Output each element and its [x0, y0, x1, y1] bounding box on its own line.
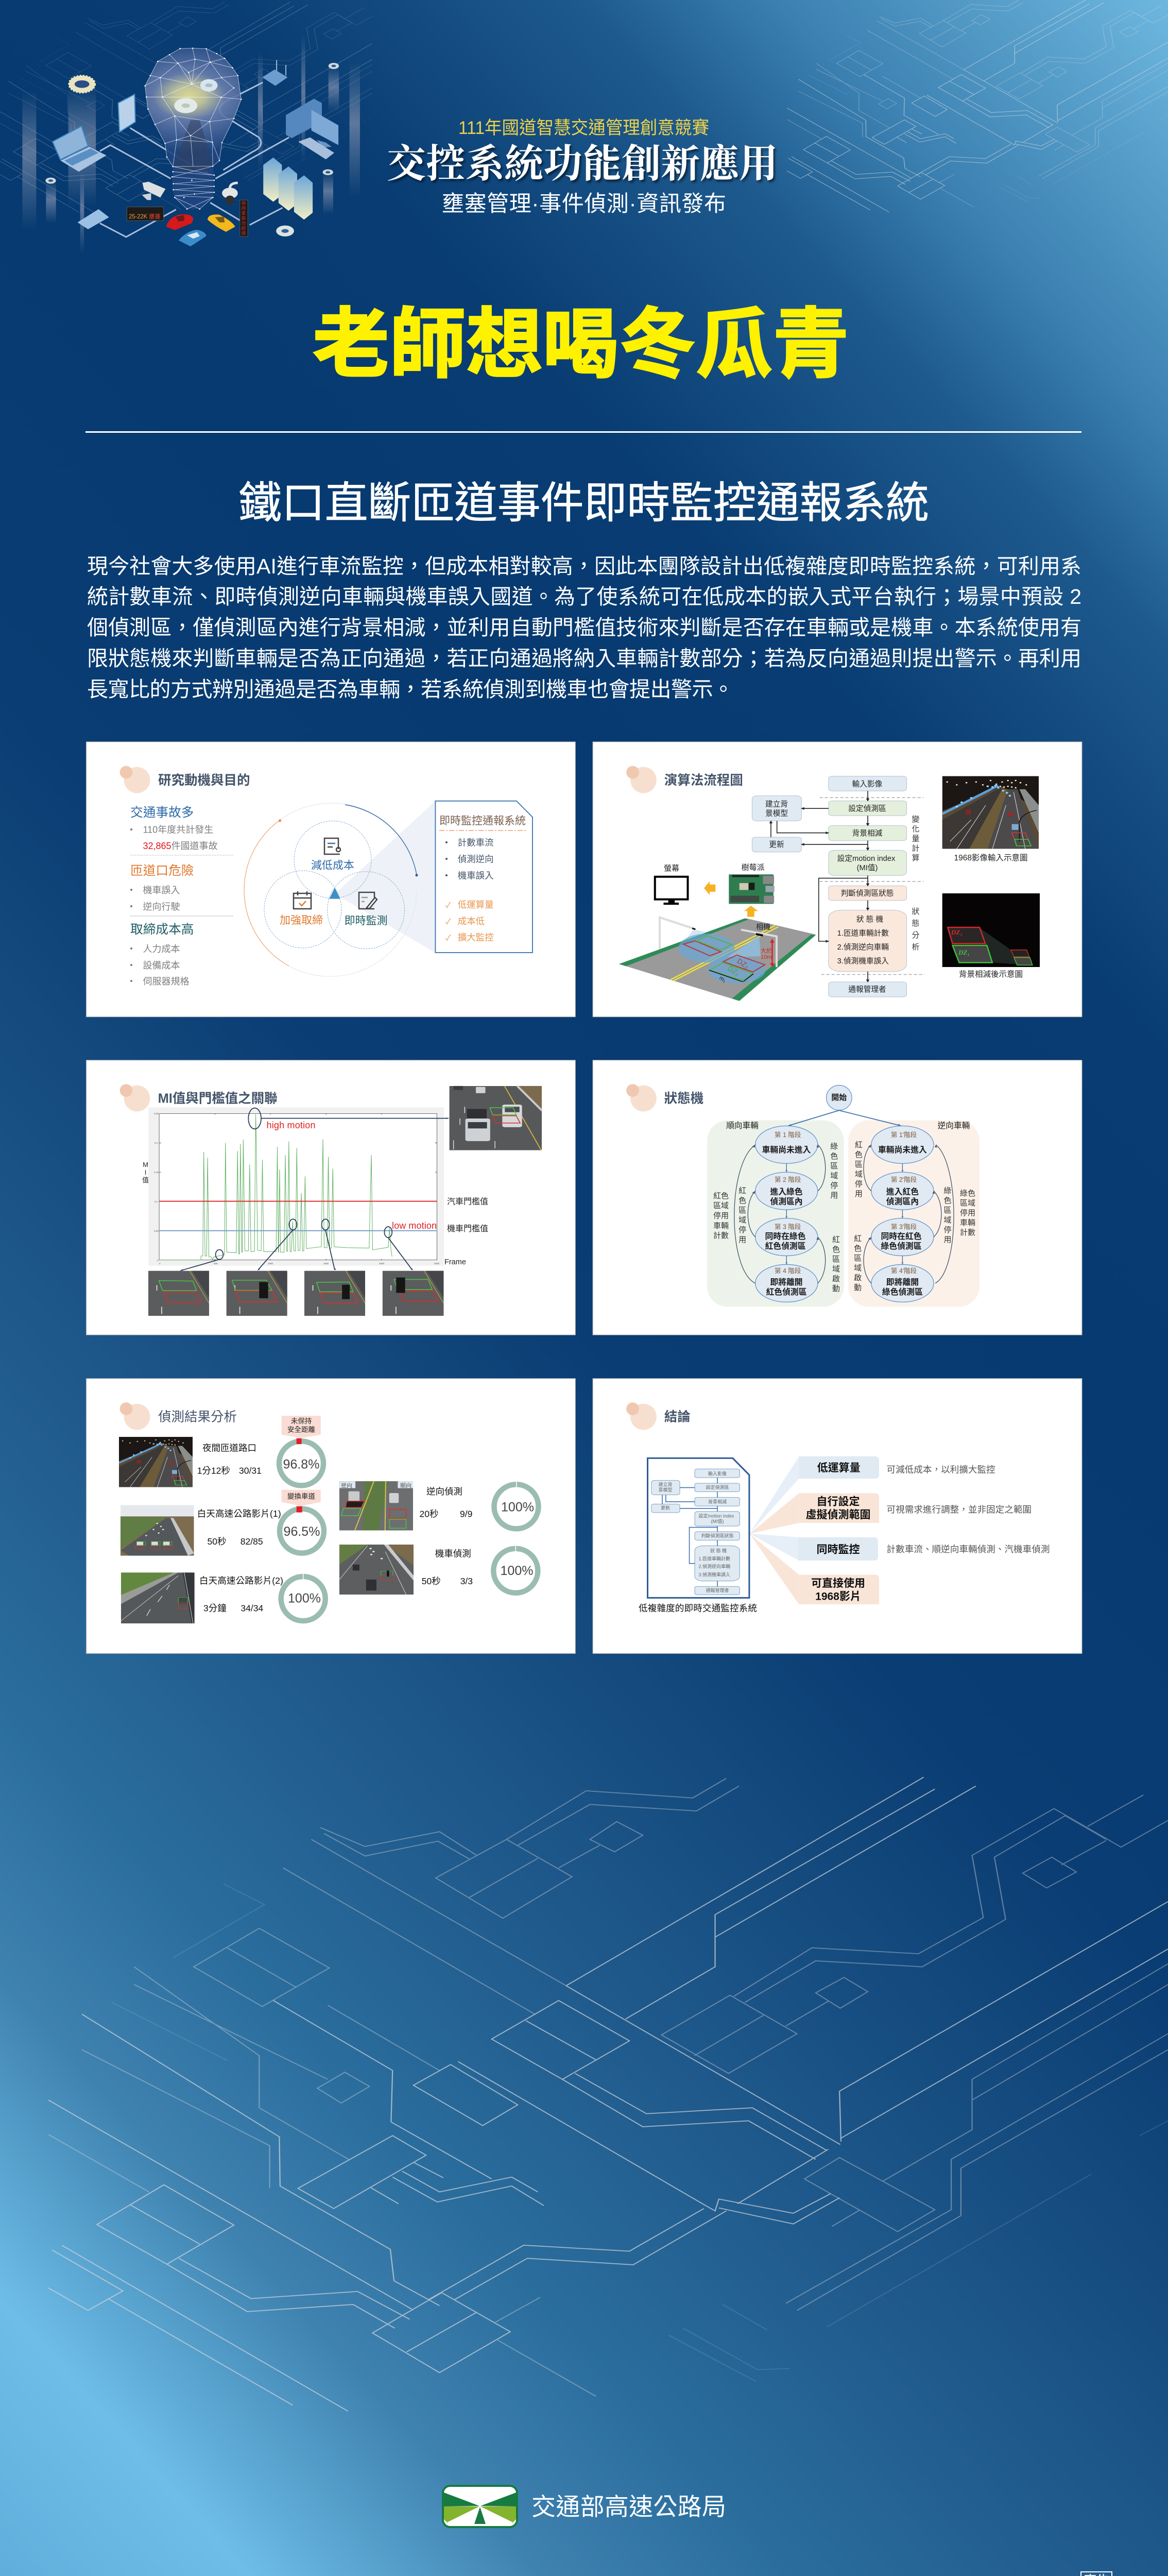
agency name: 交通部高速公路局 [531, 2493, 726, 2520]
result: daytime video 2: 3分鐘 [203, 1603, 227, 1614]
result: reverse detection: 逆向偵測 [426, 1486, 462, 1497]
state diagram: 車輛尚未進入 [878, 1145, 927, 1155]
mini system flow chart: 景模型 [658, 1487, 673, 1493]
icon: cost document [324, 838, 340, 854]
state diagram: 綠色區域停用 [829, 1142, 838, 1201]
flow chart: 設定motion index [837, 854, 896, 863]
state diagram: 計數 [713, 1231, 729, 1240]
project description: 限狀態機來判斷車輛是否為正向通過，若正向通過將納入車輛計數部分；若為反向通過則提出警示。再利用 [87, 647, 1081, 670]
state diagram: 區域 [960, 1199, 975, 1208]
left text column: 取締成本高 [130, 922, 194, 937]
state diagram: 第 1 階段 [775, 1131, 801, 1139]
icon: title circles [626, 766, 657, 793]
state diagram [713, 1085, 975, 1302]
result: daytime video 2: 100% [288, 1591, 321, 1605]
state diagram: 同時在綠色 [765, 1231, 806, 1241]
mini system flow chart [648, 1458, 749, 1598]
scene diagram: road, cameras, raspberry pi: 螢幕 [664, 864, 679, 873]
flow chart: 輸入影像 [852, 780, 883, 788]
line chart: MI over frames: 2500 [434, 1262, 440, 1265]
project description: 長寬比的方式辨別通過是否為車輛，若系統偵測到機車也會提出警示。 [87, 677, 734, 701]
state diagram: 綠色偵測區 [882, 1287, 923, 1297]
state diagram: 紅色區域停用 [737, 1187, 746, 1245]
result: motorcycle detection: 100% [501, 1564, 533, 1578]
result: reverse detection: 逆向 [341, 1482, 352, 1489]
project description: 個偵測區，僅偵測區內進行背景相減，並利用自動門檻值技術來判斷是否存在車輛或是機車。本系統使用有 [87, 616, 1081, 639]
line chart: MI over frames: 汽車門檻值 [447, 1197, 488, 1207]
flow chart: 2.偵測逆向車輛 [837, 943, 889, 952]
flow chart: 狀態分析 [911, 907, 920, 955]
line chart: MI over frames: 0.1 [154, 1200, 158, 1203]
mini system flow chart: 設定motion index [698, 1513, 734, 1518]
project title: 鐵口直斷匝道事件即時監控通報系統 [238, 479, 929, 527]
line chart: MI over frames: Frame [444, 1258, 466, 1266]
scene diagram: road, cameras, raspberry pi: m₁ [718, 975, 727, 984]
panel: research motivation [86, 742, 575, 1017]
scene diagram: road, cameras, raspberry pi: DZ₂ [735, 957, 750, 970]
scene diagram: road, cameras, raspberry pi: DZ₁ [726, 964, 741, 977]
conclusion: simultaneous monitoring [798, 1537, 1050, 1561]
flow chart: 狀 態 機 [856, 915, 883, 924]
result: motorcycle detection: 3/3 [460, 1576, 473, 1586]
state diagram: 停用 [960, 1209, 975, 1217]
scene diagram: road, cameras, raspberry pi: 相機 [756, 923, 770, 931]
line chart: MI over frames: 值 [142, 1176, 149, 1184]
result: reverse detection [339, 1481, 539, 1531]
line chart: MI over frames: 2000 [379, 1262, 385, 1265]
state diagram: 紅色偵測區 [766, 1287, 807, 1297]
result: daytime video 2: 34/34 [241, 1603, 263, 1614]
conclusion: configurable zone: 可視需求進行調整，並非固定之範圍 [887, 1504, 1032, 1515]
conclusion: low computation: 可減低成本，以利擴大監控 [887, 1465, 995, 1475]
line chart: MI over frames [142, 1107, 488, 1271]
divider [85, 431, 1081, 433]
panel: detection results [86, 1379, 575, 1654]
left text column: 32,865件國道事故 [143, 841, 218, 851]
state diagram: 第 3′階段 [891, 1223, 917, 1231]
state diagram: 進入紅色 [886, 1187, 919, 1196]
flow chart: 判斷偵測區狀態 [841, 889, 894, 898]
flow chart: 3.偵測機車誤入 [837, 957, 889, 965]
state diagram: 進入綠色 [770, 1187, 803, 1196]
icon: calendar [294, 891, 311, 909]
icon text: variable message sign: 保持車距勿超速 [241, 200, 246, 236]
line chart: MI over frames: I [145, 1168, 146, 1176]
scene diagram: road, cameras, raspberry pi: 樹莓派 [741, 863, 765, 872]
state diagram: 第 1′階段 [891, 1131, 917, 1139]
conclusion: configurable zone: 自行設定 [817, 1495, 860, 1507]
callout: real-time monitoring system: 成本低 [458, 916, 485, 926]
result: night ramp: 夜間匝道路口 [202, 1443, 256, 1453]
line chart: MI over frames: 0.2 [154, 1142, 158, 1144]
heading: 偵測結果分析 [158, 1410, 237, 1424]
result: night ramp: 未保持 [291, 1417, 312, 1425]
state diagram: 第 4′階段 [891, 1267, 917, 1275]
result: daytime video 2 [121, 1572, 325, 1623]
result: night ramp: 1分12秒 [197, 1465, 230, 1476]
result: reverse detection: 100% [501, 1500, 534, 1515]
result: reverse detection: 20秒 [419, 1509, 438, 1519]
conclusion: direct 1968 video: 可直接使用 [811, 1578, 865, 1589]
state diagram: 紅色區域停用 [854, 1141, 863, 1199]
result: night ramp: 96.8% [283, 1458, 319, 1472]
state diagram: 停用 [713, 1212, 729, 1221]
caption: 低複雜度的即時交通監控系統 [639, 1603, 757, 1614]
scene diagram: road, cameras, raspberry pi [619, 863, 816, 1001]
result: daytime video 1: 變換車道 [287, 1493, 315, 1500]
state diagram: 第 3 階段 [775, 1223, 801, 1231]
line chart: MI over frames: 1500 [323, 1262, 329, 1265]
icon: title circles [120, 1084, 150, 1111]
heading: MI值與門檻值之關聯 [158, 1091, 278, 1106]
illustration: smart light bulb with connected traffic devices [22, 35, 360, 254]
result: daytime video 1: 82/85 [241, 1536, 263, 1547]
state diagram: 紅色區域啟動 [853, 1234, 862, 1293]
result: motorcycle detection [339, 1545, 538, 1595]
state diagram: 計數 [960, 1228, 975, 1237]
state diagram: 紅色 [713, 1192, 729, 1200]
result: night ramp: 安全距離 [287, 1426, 315, 1433]
mini system flow chart: (MI值) [711, 1518, 724, 1524]
callout: real-time monitoring system: 低運算量 [458, 900, 494, 910]
flow chart [752, 776, 925, 997]
mini system flow chart: 更新 [661, 1505, 670, 1511]
project description: 現今社會大多使用AI進行車流監控，但成本相對較高，因此本團隊設計出低複雜度即時監控系統，可利用系 [87, 554, 1081, 578]
line chart: MI over frames: low motion [392, 1221, 437, 1231]
conclusion: low computation: 低運算量 [817, 1462, 861, 1474]
icon text: highway sign: 25-22K 壅塞 [129, 213, 161, 220]
photos: motorbike frames [148, 1271, 444, 1316]
zone: forward vehicles [707, 1120, 844, 1307]
mini system flow chart: 狀 態 機 [710, 1548, 727, 1553]
conclusion: direct 1968 video [799, 1574, 879, 1604]
icon: title circles [120, 766, 150, 793]
flow chart: 景模型 [765, 809, 788, 818]
line chart: MI over frames: 機車門檻值 [447, 1224, 488, 1233]
line chart: MI over frames: 0.25 [154, 1112, 159, 1115]
conclusion: direct 1968 video: 1968影片 [815, 1591, 861, 1603]
ad mark [1081, 2572, 1112, 2576]
result: motorcycle detection: 50秒 [422, 1576, 441, 1586]
state diagram: 逆向車輛 [938, 1121, 970, 1130]
line chart: MI over frames: 500 [214, 1262, 218, 1265]
logo: freeway bureau [443, 2486, 517, 2527]
line chart: MI over frames: 0 [157, 1259, 159, 1262]
mini system flow chart: 建立背 [658, 1482, 673, 1487]
callout: real-time monitoring system [435, 801, 533, 953]
state diagram: 車輛 [713, 1222, 729, 1230]
flow chart: 1.匝道車輛計數 [837, 929, 889, 938]
team name: 老師想喝冬瓜青 [313, 301, 849, 387]
line chart: MI over frames: 0.15 [154, 1171, 159, 1174]
left text column: 交通事故多 [130, 805, 194, 820]
state diagram: 綠色偵測區 [881, 1241, 922, 1251]
left text column: 機車誤入 [143, 885, 180, 895]
conclusion: low computation [799, 1456, 995, 1479]
left text column [130, 805, 233, 987]
flow chart: 通報管理者 [848, 985, 886, 994]
panel: conclusion [593, 1379, 1082, 1654]
flow chart: 變化量計算 [911, 815, 920, 863]
conclusion: simultaneous monitoring: 同時監控 [817, 1544, 860, 1555]
mini system flow chart: 設定偵測區 [706, 1484, 729, 1490]
result: motorcycle detection: 機車偵測 [435, 1548, 471, 1558]
photo: after background subtraction: 背景相減後示意圖 [959, 969, 1023, 979]
result: reverse detection: 順向 [400, 1482, 411, 1489]
left text column: 人力成本 [143, 944, 180, 954]
state diagram: 第 2′階段 [891, 1176, 917, 1183]
label: 即時監測 [345, 915, 388, 927]
event tagline: 壅塞管理·事件偵測·資訊發布 [442, 192, 726, 216]
photo: high motion truck [450, 1086, 542, 1150]
line chart: MI over frames: high motion [267, 1120, 315, 1130]
state diagram: 綠色 [960, 1189, 975, 1198]
mini system flow chart: 判斷偵測區狀態 [701, 1533, 734, 1538]
photo: 1968 image input [942, 776, 1039, 862]
result: reverse detection: 9/9 [460, 1509, 472, 1519]
event subtitle: 111年國道智慧交通管理創意競賽 [458, 118, 709, 138]
state diagram: 即將離開 [770, 1278, 803, 1287]
left text column: 110年度共計發生 [143, 825, 213, 835]
flow chart: 更新 [769, 840, 784, 849]
state diagram: 紅色區域啟動 [831, 1235, 840, 1294]
conclusion: simultaneous monitoring: 計數車流、順逆向車輛偵測、汽機車偵測 [887, 1544, 1050, 1554]
label: 加強取締 [280, 914, 323, 926]
state diagram: 車輛尚未進入 [762, 1145, 811, 1155]
callout: real-time monitoring system: 偵測逆向 [458, 854, 494, 865]
result: daytime video 2: 白天高速公路影片(2) [199, 1575, 283, 1586]
result: daytime video 1: 50秒 [207, 1536, 226, 1547]
state diagram: 順向車輛 [726, 1121, 759, 1130]
state diagram: 綠色區域停用 [942, 1187, 952, 1245]
mini system flow chart: 背景相減 [708, 1499, 727, 1504]
state diagram: 紅色偵測區 [765, 1241, 806, 1251]
state diagram: 車輛 [960, 1218, 975, 1227]
flow chart: 設定偵測區 [848, 804, 886, 813]
result: daytime video 1: 白天高速公路影片(1) [197, 1509, 281, 1519]
conclusion: configurable zone: 虛擬偵測範圍 [805, 1509, 870, 1521]
fan connectors [750, 1456, 799, 1604]
icon: monitor pen [359, 892, 377, 909]
photo: after background subtraction [942, 893, 1040, 979]
flow chart: 建立背 [765, 800, 788, 809]
state diagram: 偵測區內 [886, 1197, 919, 1207]
callout: real-time monitoring system: 機車誤入 [458, 871, 494, 881]
state diagram: 開始 [831, 1093, 847, 1102]
callout: real-time monitoring system: ✓ [445, 918, 451, 926]
mini system flow chart: 輸入影像 [708, 1471, 727, 1477]
flow chart: 背景相減 [852, 829, 883, 838]
icon: title circles [626, 1402, 657, 1430]
callout: real-time monitoring system: ✓ [445, 934, 451, 943]
project description: 統計數車流、即時偵測逆向車輛與機車誤入國道。為了使系統可在低成本的嵌入式平台執行；場景中預設 2 [87, 585, 1081, 608]
photo: after background subtraction: DZ₁ [958, 948, 970, 956]
panel: MI value and thresholds [86, 1060, 575, 1335]
icon: title circles [120, 1402, 150, 1430]
mini system flow chart: 1.匝道車輛計數 [698, 1555, 730, 1561]
photo: after background subtraction: DZ₂ [951, 928, 963, 936]
line chart: MI over frames: 0.05 [154, 1230, 159, 1232]
left text column: 匝道口危險 [130, 863, 194, 878]
venn diagram [244, 801, 435, 976]
panel: state machine [593, 1060, 1082, 1335]
state diagram: 第 2 階段 [775, 1176, 801, 1183]
result: daytime video 1: 96.5% [284, 1524, 320, 1539]
result: night ramp [119, 1416, 323, 1487]
state diagram: 第 4 階段 [775, 1267, 801, 1275]
icon: title circles [626, 1084, 657, 1111]
line chart: MI over frames: M [143, 1161, 148, 1168]
line chart: MI over frames: 0 [159, 1262, 161, 1265]
flow chart: (MI值) [857, 863, 878, 872]
panel: algorithm flow chart [593, 742, 1082, 1017]
mini system flow chart: 3.偵測機車誤入 [698, 1571, 730, 1577]
mini system flow chart: 2.偵測逆向車輛 [698, 1563, 730, 1569]
result: daytime video 1 [121, 1490, 324, 1556]
heading: 結論 [664, 1410, 691, 1424]
state diagram: 即將離開 [886, 1278, 919, 1287]
state diagram: 區域 [713, 1201, 729, 1210]
line chart: MI over frames: 1000 [268, 1262, 273, 1265]
callout: real-time monitoring system: 計數車流 [458, 838, 494, 848]
state diagram: 偵測區內 [770, 1197, 803, 1207]
left text column: 逆向行駛 [143, 902, 180, 912]
zone: reverse vehicles [848, 1120, 980, 1307]
project description [87, 554, 1081, 701]
photo: 1968 image input: 1968影像輸入示意圖 [954, 853, 1027, 862]
label: 減低成本 [311, 860, 354, 872]
left text column: 設備成本 [143, 960, 180, 971]
heading: 研究動機與目的 [158, 773, 250, 788]
heading: 狀態機 [664, 1091, 703, 1106]
state diagram: 同時在紅色 [881, 1231, 922, 1241]
callout: real-time monitoring system: 擴大監控 [458, 933, 494, 943]
mini system flow chart: 通報管理者 [706, 1587, 729, 1593]
scene diagram: road, cameras, raspberry pi: 大於 [761, 947, 772, 954]
result: night ramp: 30/31 [239, 1465, 262, 1476]
event title: 交控系統功能創新應用 [387, 143, 778, 186]
callout: real-time monitoring system: ✓ [445, 901, 451, 910]
left text column: 伺服器規格 [143, 976, 190, 987]
callout: real-time monitoring system: 即時監控通報系統 [439, 815, 526, 827]
conclusion: configurable zone [799, 1493, 1032, 1523]
scene diagram: road, cameras, raspberry pi: 10m [761, 954, 771, 960]
heading: 演算法流程圖 [664, 773, 743, 788]
